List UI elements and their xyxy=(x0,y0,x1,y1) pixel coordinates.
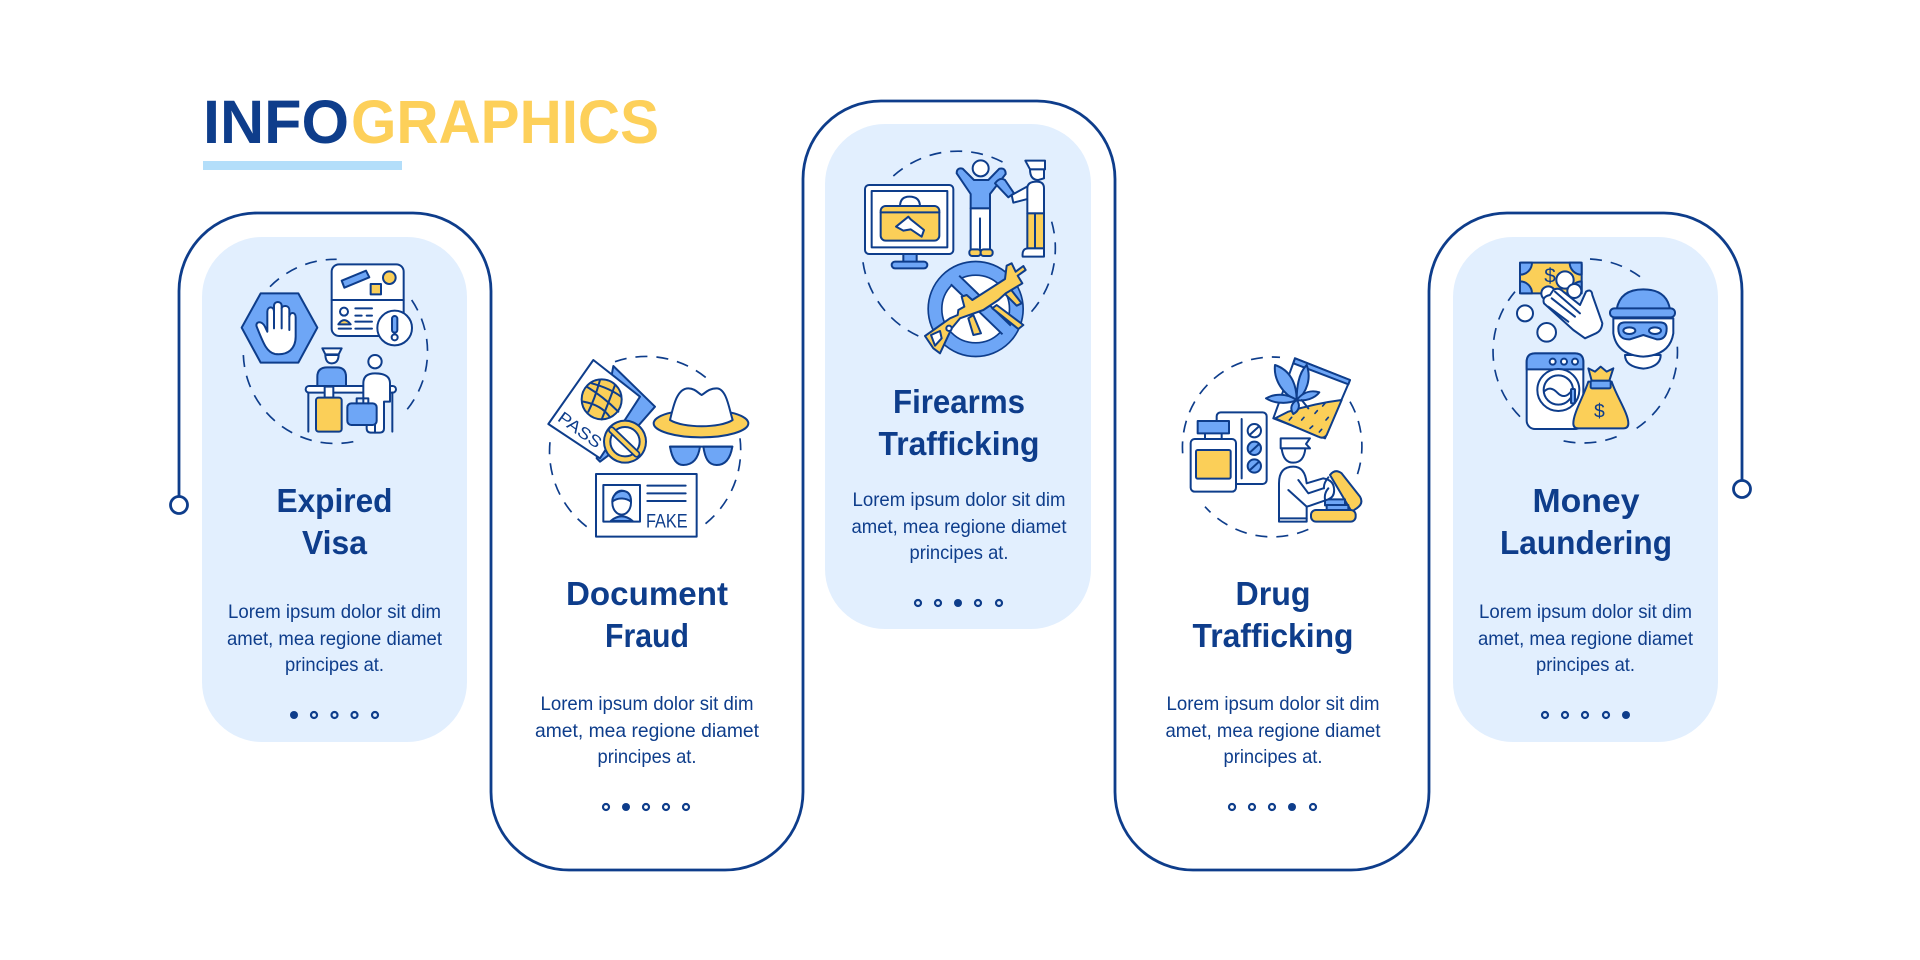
title: GRAPHICS xyxy=(351,88,659,156)
text block: amet, mea regione diamet xyxy=(1478,628,1694,650)
heading: money laundering: Laundering xyxy=(1500,524,1672,561)
icon: expired visa xyxy=(242,259,428,443)
page dots xyxy=(915,599,1002,607)
text block: Lorem ipsum dolor sit dim xyxy=(540,693,754,715)
icon: document fraud: PASS xyxy=(554,408,605,452)
title: INFO xyxy=(203,88,349,156)
icon: money laundering xyxy=(1493,259,1677,443)
icon: money laundering: $ xyxy=(1544,265,1556,288)
heading: firearms trafficking xyxy=(878,383,1040,462)
text block: principes at. xyxy=(1536,654,1635,676)
text block: Lorem ipsum dolor sit dim xyxy=(1479,601,1692,623)
heading: expired visa xyxy=(276,482,392,561)
page dots xyxy=(1542,711,1630,719)
panel: document fraud xyxy=(535,356,760,811)
heading: document fraud: Document xyxy=(566,575,728,612)
title xyxy=(203,88,659,156)
heading: document fraud: Fraud xyxy=(605,617,689,654)
text block: Lorem ipsum dolor sit dim xyxy=(852,489,1066,511)
heading: money laundering xyxy=(1500,482,1672,561)
heading: money laundering: Money xyxy=(1532,482,1640,519)
heading: firearms trafficking: Firearms xyxy=(893,383,1025,420)
icon: document fraud xyxy=(548,356,748,537)
page dots xyxy=(603,803,689,811)
text block: principes at. xyxy=(910,542,1008,564)
panel: firearms trafficking xyxy=(825,124,1091,629)
page dots xyxy=(290,711,378,719)
text block: amet, mea regione diamet xyxy=(535,720,760,742)
icon: firearms trafficking xyxy=(863,151,1055,353)
heading: drug trafficking: Trafficking xyxy=(1192,617,1354,654)
heading: drug trafficking: Drug xyxy=(1236,575,1310,612)
text block: Lorem ipsum dolor sit dim xyxy=(228,601,441,623)
text block: amet, mea regione diamet xyxy=(227,628,443,650)
heading: expired visa: Expired xyxy=(276,482,392,519)
panel: money laundering xyxy=(1453,237,1718,742)
icon: drug trafficking xyxy=(1182,357,1362,537)
icon: money laundering: $ xyxy=(1594,402,1605,423)
text block: principes at. xyxy=(598,746,696,768)
text block xyxy=(1478,601,1694,676)
text block: principes at. xyxy=(285,654,384,676)
text block: amet, mea regione diamet xyxy=(852,516,1067,538)
title underline xyxy=(203,161,402,170)
text block: Lorem ipsum dolor sit dim xyxy=(1166,693,1380,715)
page dots xyxy=(1229,803,1316,811)
connecting outline xyxy=(170,101,1750,870)
text block: principes at. xyxy=(1224,746,1322,768)
text block xyxy=(1166,693,1381,768)
heading: document fraud xyxy=(566,575,728,654)
text block: amet, mea regione diamet xyxy=(1166,720,1381,742)
heading: drug trafficking xyxy=(1192,575,1354,654)
text block xyxy=(535,693,760,768)
heading: expired visa: Visa xyxy=(302,524,368,561)
text block xyxy=(227,601,443,676)
panel: drug trafficking xyxy=(1166,357,1381,811)
text block xyxy=(852,489,1067,564)
icon: document fraud: FAKE xyxy=(646,511,688,532)
heading: firearms trafficking: Trafficking xyxy=(878,425,1040,462)
panel: expired visa xyxy=(202,237,467,742)
